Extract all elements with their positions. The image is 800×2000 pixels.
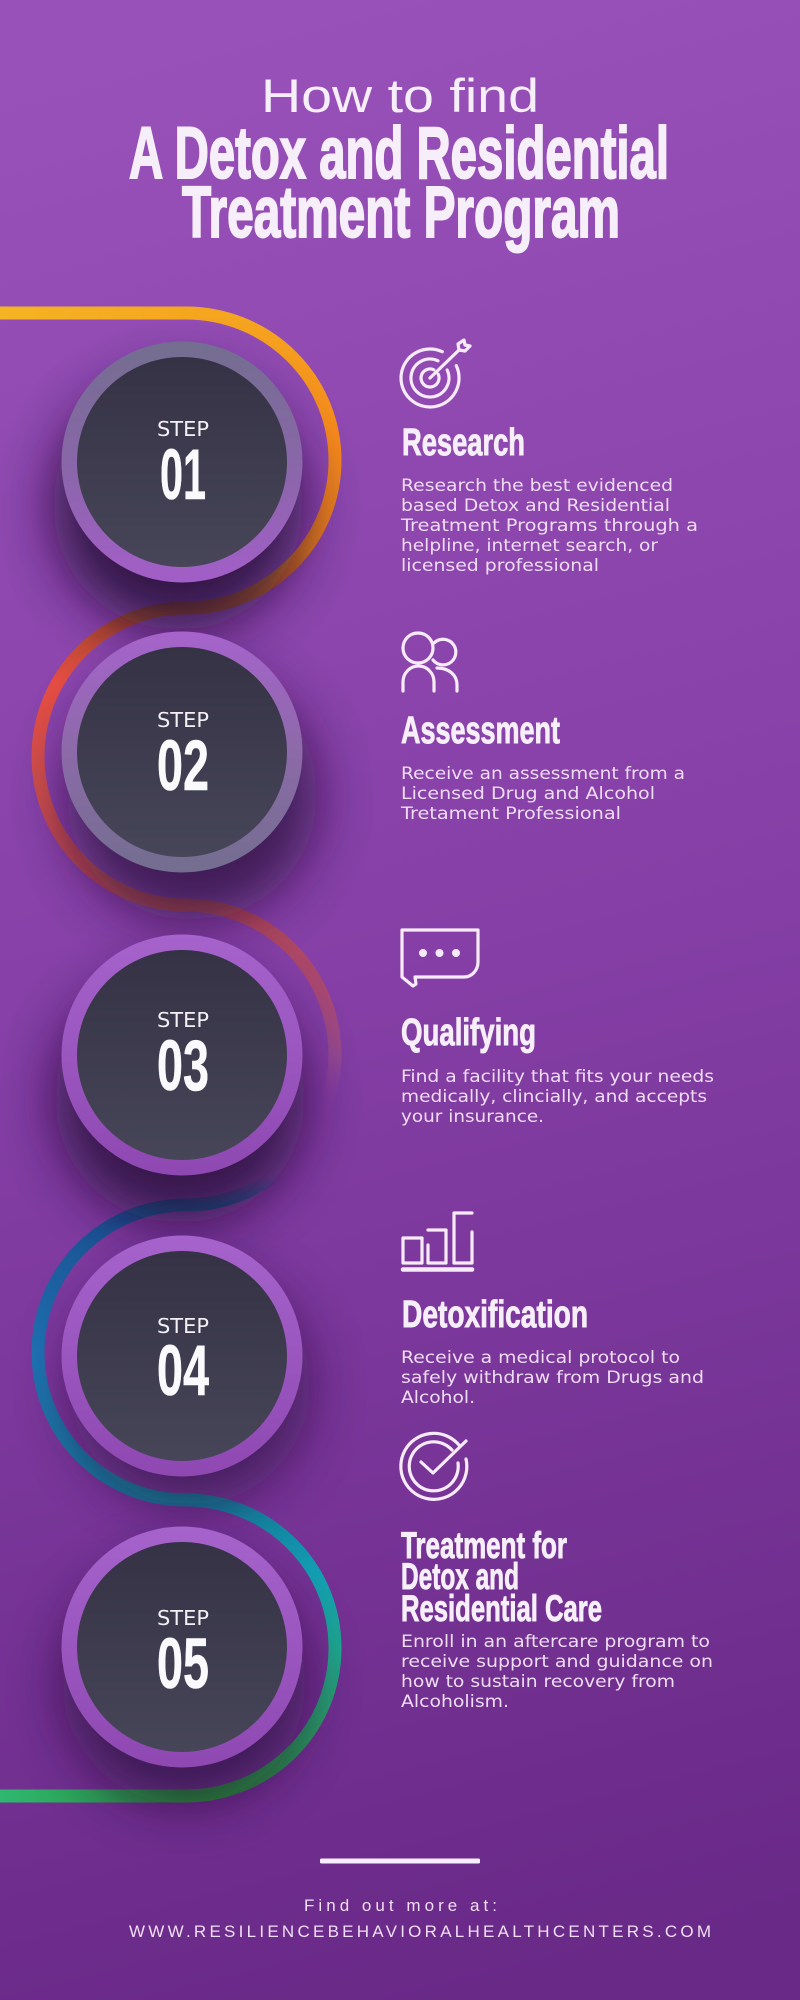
heading: research: Research xyxy=(402,422,525,464)
step 04 circle xyxy=(62,1236,310,1505)
step 03 circle: STEP xyxy=(157,1008,209,1032)
text: treatment description xyxy=(401,1632,713,1712)
text: research description: Treatment Programs through a xyxy=(400,516,698,536)
panel: assessment xyxy=(400,633,685,824)
text: detoxification description: Alcohol. xyxy=(401,1388,475,1408)
heading: treatment: Treatment for xyxy=(401,1525,567,1566)
heading: qualifying: Qualifying xyxy=(401,1012,536,1054)
text: research description: Research the best evidenced xyxy=(401,476,673,496)
text: qualifying description: medically, clincially, and accepts xyxy=(401,1087,707,1107)
text: detoxification description: Receive a medical protocol to xyxy=(401,1348,680,1368)
step 05 circle: 05 xyxy=(157,1625,209,1704)
step 03 circle xyxy=(55,934,305,1223)
step 04 circle: 04 xyxy=(157,1332,209,1411)
text: assessment description: Tretament Professional xyxy=(400,804,621,824)
step 01 circle: STEP xyxy=(157,417,209,441)
icon: bar chart xyxy=(403,1213,472,1270)
icon: target xyxy=(401,340,470,407)
step 04 circle: STEP xyxy=(157,1314,209,1338)
text: treatment description: receive support and guidance on xyxy=(401,1652,713,1672)
step 03 circle: 03 xyxy=(157,1027,209,1106)
text: qualifying description: your insurance. xyxy=(401,1107,544,1127)
footer xyxy=(129,1858,711,1941)
step 05 circle: STEP xyxy=(157,1606,209,1630)
text: assessment description: Licensed Drug and Alcohol xyxy=(401,784,655,804)
text: assessment description: Receive an assessment from a xyxy=(401,764,685,784)
text: detoxification description xyxy=(401,1348,704,1408)
heading: treatment: Detox and xyxy=(401,1556,519,1597)
step 01 circle: 01 xyxy=(160,436,206,515)
connector: winding coloured ribbon xyxy=(0,313,335,1796)
text: treatment description: Alcoholism. xyxy=(401,1692,509,1712)
icon: people xyxy=(403,633,457,691)
text: assessment description xyxy=(400,764,685,824)
footer: WWW.RESILIENCEBEHAVIORALHEALTHCENTERS.COM xyxy=(129,1922,711,1941)
text: treatment description: how to sustain recovery from xyxy=(401,1672,675,1692)
step 05 circle xyxy=(62,1526,306,1804)
panel: research xyxy=(400,340,698,576)
heading: treatment xyxy=(401,1525,602,1629)
text: research description: based Detox and Residential xyxy=(401,496,670,516)
panel: treatment xyxy=(401,1433,713,1712)
heading: treatment: Residential Care xyxy=(401,1588,602,1629)
text: qualifying description: Find a facility that fits your needs xyxy=(401,1067,714,1087)
text: detoxification description: safely withdraw from Drugs and xyxy=(401,1368,704,1388)
heading: assessment: Assessment xyxy=(401,710,560,752)
title xyxy=(129,69,669,253)
step 02 circle: STEP xyxy=(157,708,209,732)
text: research description: licensed professional xyxy=(401,556,599,576)
step 02 circle xyxy=(62,632,317,920)
title: How to find xyxy=(261,69,539,122)
text: research description: helpline, internet search, or xyxy=(401,536,658,556)
icon: check in circle xyxy=(401,1433,467,1499)
step 01 circle xyxy=(53,342,303,630)
text: qualifying description xyxy=(401,1067,714,1127)
icon: chat bubble xyxy=(402,930,478,986)
step 02 circle: 02 xyxy=(157,727,209,806)
text: treatment description: Enroll in an aftercare program to xyxy=(401,1632,710,1652)
footer: Find out more at: xyxy=(304,1896,497,1915)
panel: detoxification xyxy=(401,1213,704,1408)
panel: qualifying xyxy=(401,930,714,1127)
heading: detoxification: Detoxification xyxy=(402,1294,588,1336)
text: research description xyxy=(400,476,698,576)
